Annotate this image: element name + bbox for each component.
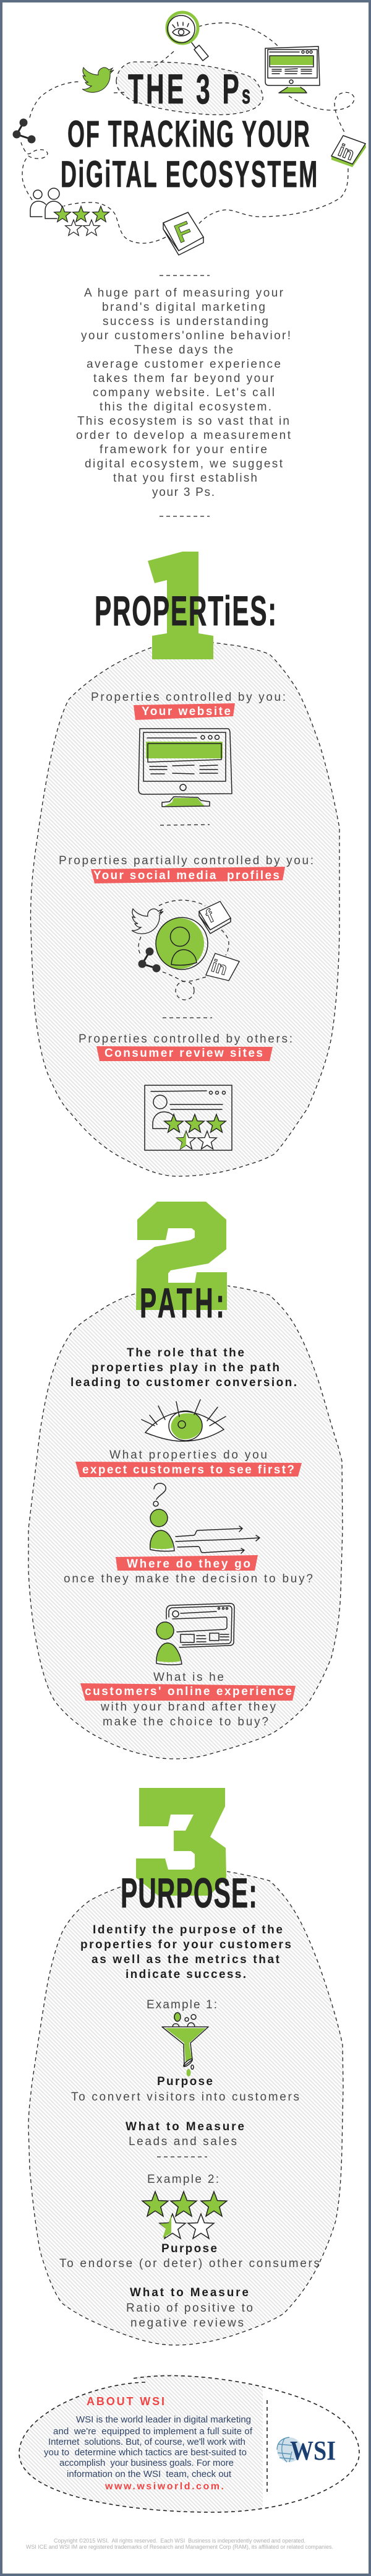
text: what is he: What is he	[153, 1671, 224, 1684]
intro text block: success is understanding	[103, 315, 268, 328]
intro text block: that you first establish	[113, 472, 257, 485]
copyright: Copyright ©2015 WSI. All rights reserved. Each WSI Business is independently owned and operated.	[54, 2538, 305, 2544]
icon: facebook tile: F	[171, 215, 196, 248]
text: after purchase: with your brand after they	[100, 1701, 276, 1714]
number 1	[148, 552, 213, 659]
text: measure example 2: Ratio of positive to	[126, 2302, 253, 2315]
panel: about WSI	[19, 2374, 359, 2512]
title: OF TRACKiNG YOUR	[67, 114, 310, 155]
text: controlled by others: Properties controlled by others:	[79, 1033, 292, 1046]
text: role of properties	[70, 1347, 297, 1389]
panel background	[28, 1871, 343, 2345]
intro text block: A huge part of measuring your	[84, 287, 284, 300]
icon: social network	[132, 900, 239, 1000]
icon: share nodes	[12, 119, 36, 144]
label: consumer review sites: Consumer review sites	[104, 1047, 263, 1060]
text: identify purpose	[80, 1923, 291, 1981]
text: what properties: What properties do you	[109, 1449, 267, 1462]
icon: person with arrows	[150, 1483, 260, 1553]
text: about body: WSI is the world leader in digital marketing	[76, 2414, 251, 2425]
icon: social network: in	[209, 956, 229, 979]
intro text block: These days the	[134, 344, 233, 357]
icon: review window	[145, 1085, 232, 1150]
text: controlled by you: Properties controlled by you:	[91, 691, 286, 704]
intro text block: brand's digital marketing	[102, 301, 265, 314]
text: about body: and we're equipped to implement a full suite of	[53, 2426, 253, 2437]
text: measure example 1: Leads and sales	[129, 2135, 237, 2148]
logo: WSI	[277, 2435, 336, 2466]
text: about body: information on the WSI team, check out	[67, 2469, 232, 2479]
icon: linkedin tile: in	[336, 141, 357, 164]
text: role of properties: properties play in the path	[92, 1361, 279, 1374]
icon: linkedin tile	[331, 136, 366, 167]
text: partially controlled: Properties partially controlled by you:	[59, 854, 313, 867]
number 2	[136, 1202, 227, 1310]
text: purpose example 2	[59, 2242, 320, 2270]
text: identify purpose: indicate success.	[126, 1968, 246, 1981]
intro text block: average customer experience	[87, 358, 281, 371]
link: website: www.wsiworld.com.	[104, 2481, 224, 2492]
intro text block: takes them far beyond your	[93, 372, 275, 385]
intro text block: order to develop a measurement	[76, 429, 291, 442]
label: your website: Your website	[142, 705, 231, 718]
icon: twitter bird	[82, 67, 114, 92]
label: expect customers: expect customers to see first?	[82, 1464, 294, 1477]
intro text block: your customers'online behavior!	[81, 329, 291, 342]
text: role of properties: The role that the	[127, 1347, 244, 1360]
label: where do they go: Where do they go	[127, 1558, 250, 1571]
text: after purchase	[100, 1701, 276, 1728]
panel background	[30, 643, 339, 1176]
text: about body: Internet solutions. But, of course, we'll work with	[48, 2437, 245, 2447]
label: social media profiles: Your social media profiles	[93, 869, 279, 882]
text: purpose example 2: Purpose	[161, 2242, 217, 2255]
copyright	[26, 2538, 333, 2550]
panel: path	[28, 1202, 343, 1759]
text: about body: accomplish your business goals. For more	[59, 2458, 234, 2468]
panel background	[28, 1286, 343, 1759]
icon: monitor	[265, 46, 320, 93]
heading: properties: PROPERTiES:	[95, 587, 276, 635]
icon: people with stars	[30, 188, 109, 235]
text: measure example 2: What to Measure	[130, 2286, 249, 2299]
copyright: WSI ICE and WSI IM are registered trademarks of Research and Management Corp (RAM), its affiliated or related companies.	[26, 2544, 333, 2550]
icon: funnel	[162, 2013, 208, 2076]
intro text block: This ecosystem is so vast that in	[77, 415, 289, 428]
label: your website	[134, 703, 235, 720]
text: purpose example 1: To convert visitors into customers	[71, 2091, 299, 2104]
about background	[19, 2374, 263, 2512]
title: DiGiTAL ECOSYSTEM	[61, 154, 317, 195]
panel: properties	[30, 552, 339, 1176]
logo: WSI: WSI	[290, 2435, 336, 2466]
text: once they decide: once they make the decision to buy?	[64, 1572, 313, 1585]
text: after purchase: make the choice to buy?	[103, 1715, 268, 1728]
heading: purpose: PURPOSE:	[121, 1869, 257, 1917]
heading: about WSI: ABOUT WSI	[87, 2395, 164, 2408]
intro text block: company website. Let's call	[93, 386, 275, 399]
intro text block: this the digital ecosystem.	[100, 401, 271, 414]
text: about body: you to determine which tactics are best-suited to	[44, 2447, 247, 2458]
text: identify purpose: as well as the metrics that	[92, 1953, 280, 1966]
dashed journey path	[21, 23, 354, 243]
title	[61, 65, 317, 195]
text: measure example 1	[126, 2120, 244, 2148]
text: measure example 2	[126, 2286, 253, 2330]
header illustration	[12, 12, 366, 255]
icon: eye	[142, 1400, 226, 1441]
icon: person with browser	[156, 1603, 234, 1665]
text: identify purpose: Identify the purpose of the	[93, 1923, 283, 1936]
text: measure example 1: What to Measure	[126, 2120, 244, 2133]
icon: rating stars	[142, 2192, 227, 2239]
label: online experience: customers' online experience	[85, 1685, 292, 1698]
text: purpose example 1: Purpose	[157, 2075, 213, 2088]
intro text block: framework for your entire	[100, 443, 267, 456]
title hatch blob	[116, 62, 263, 115]
text: example 2: Example 2:	[147, 2173, 219, 2186]
number 3	[136, 1788, 226, 1896]
dashed outline	[19, 2375, 359, 2512]
icon: magnifier with eye	[167, 12, 208, 61]
title: THE 3 Ps	[128, 65, 250, 113]
icon: facebook tile	[163, 212, 203, 255]
icon: website monitor	[139, 729, 232, 807]
intro text block	[76, 275, 291, 516]
text: role of properties: leading to customer conversion.	[70, 1376, 297, 1389]
intro text block: your 3 Ps.	[152, 486, 215, 499]
intro text block: digital ecosystem, we suggest	[85, 458, 283, 471]
text: measure example 2: negative reviews	[130, 2317, 244, 2330]
text: about body	[44, 2414, 253, 2479]
icon: social network: f	[203, 906, 218, 927]
text: identify purpose: properties for your customers	[80, 1938, 291, 1951]
heading: path: PATH:	[140, 1279, 224, 1327]
text: purpose example 1	[71, 2075, 299, 2104]
text: example 1: Example 1:	[147, 1998, 217, 2011]
text: purpose example 2: To endorse (or deter) other consumers	[59, 2257, 320, 2270]
panel: purpose	[28, 1788, 343, 2345]
